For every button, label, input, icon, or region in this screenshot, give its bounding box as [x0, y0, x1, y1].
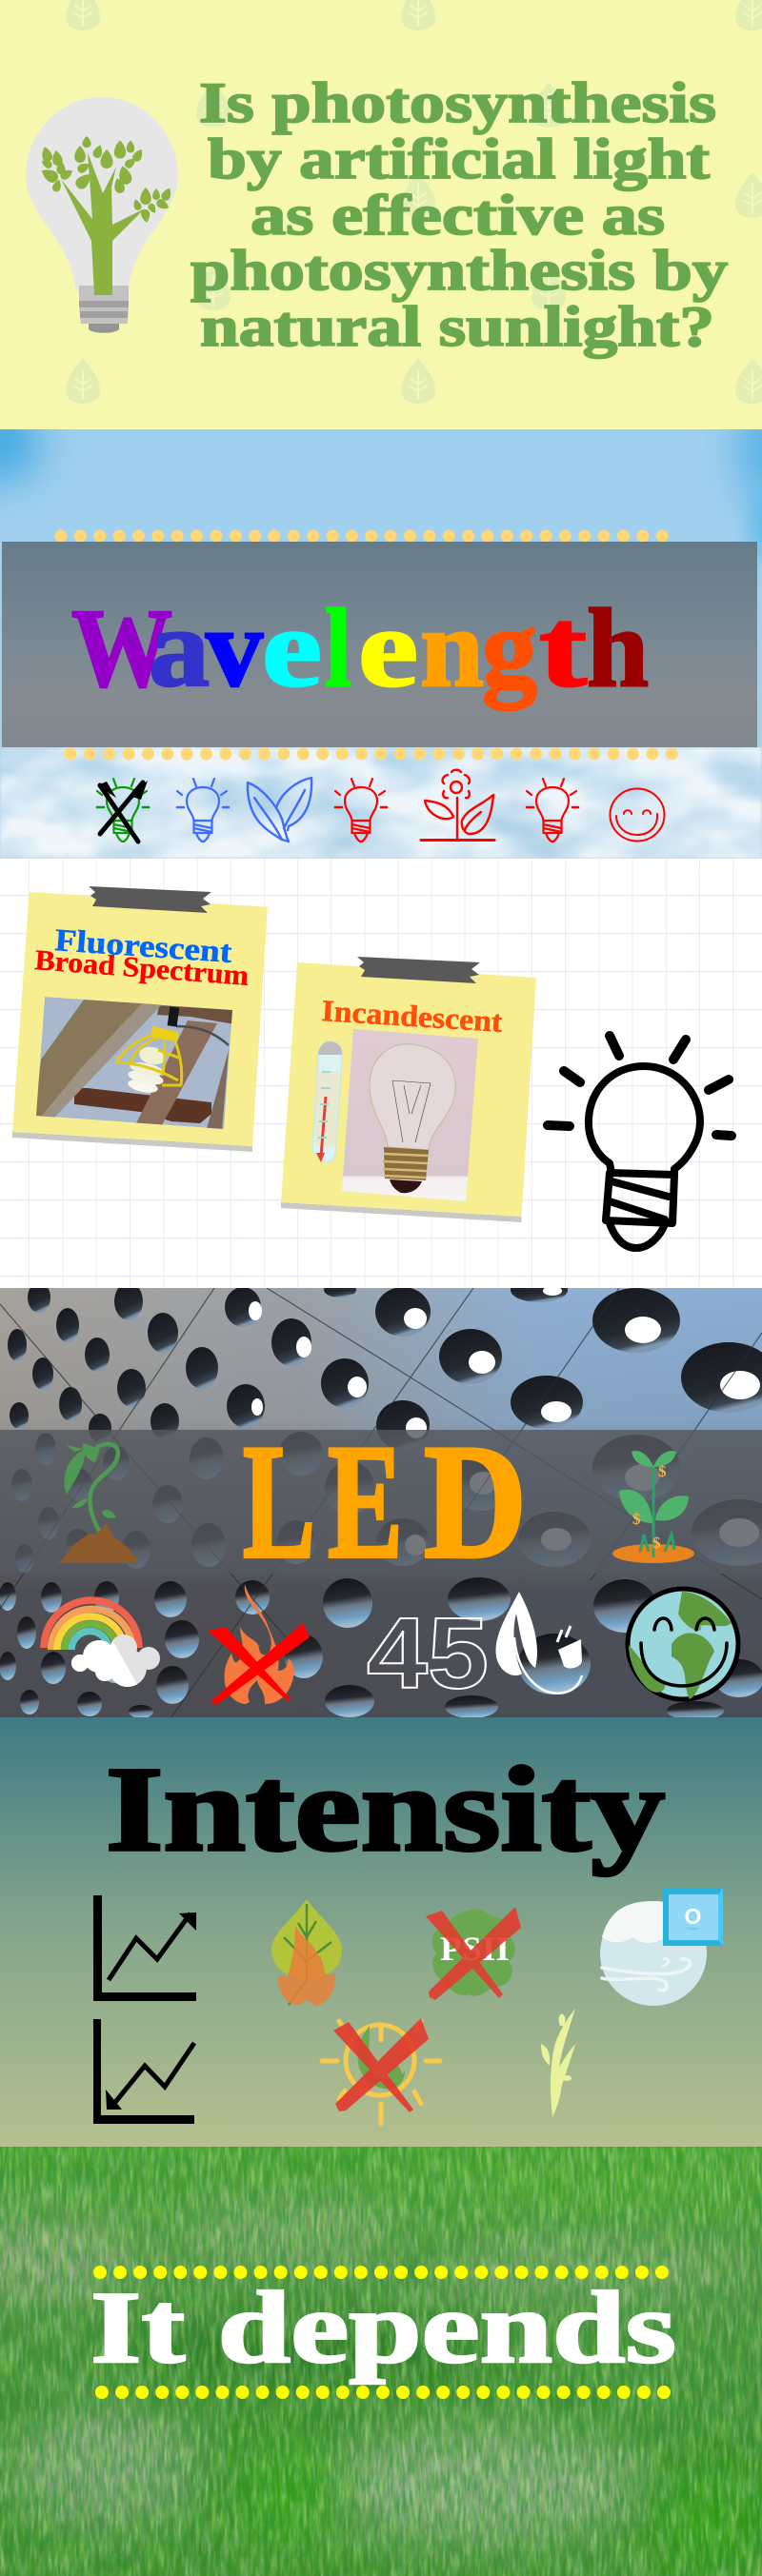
- label: 450 nm value: 45: [367, 1597, 489, 1710]
- heading: LED: E: [328, 1412, 403, 1593]
- panel: LED section: [0, 1278, 762, 1720]
- heading: Wavelength: e: [262, 585, 322, 710]
- icon: cloud and oxygen: [600, 1888, 723, 2006]
- icon: oxygen element tile: [663, 1888, 723, 1946]
- heading: Wavelength: [71, 585, 649, 710]
- note: incandescent: [281, 957, 732, 1248]
- tape: [89, 886, 211, 913]
- heading: Wavelength: l: [325, 585, 351, 710]
- heading: Wavelength: W: [71, 585, 172, 710]
- heading: Wavelength: g: [482, 585, 537, 710]
- heading: It depends: It depends: [90, 2271, 676, 2385]
- photo: incandescent bulb: [342, 1029, 478, 1201]
- icon: oxygen element tile: Oxygen: [687, 1926, 699, 1931]
- note: fluorescent: [12, 886, 268, 1152]
- chart icon: falling arrow: [93, 2019, 194, 2124]
- icon: rainbow with cloud: [44, 1600, 160, 1687]
- heading: Wavelength: e: [358, 585, 418, 710]
- icon: thermometer: [312, 1041, 342, 1162]
- icon: leaf with flame: [271, 1899, 342, 2006]
- icon: red flower with leaves: [421, 770, 494, 840]
- heading: LED: [243, 1412, 527, 1593]
- photo: fluorescent bulb in yellow cage: [34, 997, 234, 1131]
- icon: crossed-out PSII: [426, 1907, 521, 2000]
- title: as effective as: [251, 184, 665, 247]
- title: Is photosynthesis: [199, 71, 716, 134]
- heading: Wavelength: v: [206, 585, 263, 710]
- icon: red bulb: [527, 779, 578, 842]
- overlay band: [0, 1430, 762, 1574]
- panel: title section: [0, 0, 762, 429]
- icon: crossed-out PSII: PSII: [440, 1930, 510, 1968]
- icon: crossed-out flame: [208, 1584, 310, 1705]
- panel: conclusion section: [0, 2147, 762, 2576]
- icon: blue bulb: [177, 779, 229, 842]
- heading: Wavelength: n: [420, 585, 484, 710]
- overlay band: [2, 542, 757, 747]
- icon: leaf and plug: [496, 1592, 582, 1694]
- icon: crossed-out sun with leaf: [322, 2018, 440, 2124]
- icon: money plant: $: [658, 1462, 667, 1480]
- icon: money plant: [612, 1451, 694, 1563]
- icon: oxygen element tile: O: [685, 1904, 701, 1929]
- icon: pale plant sprig: [541, 2009, 575, 2117]
- icon: smiling earth: [628, 1589, 738, 1699]
- panel: wavelength section: [0, 390, 762, 859]
- icon: sprout in soil: [59, 1443, 140, 1563]
- dotted border: bottom: [70, 748, 672, 760]
- chart icon: rising arrow: [93, 1895, 196, 2001]
- heading: LED: L: [243, 1412, 315, 1593]
- tape: [357, 957, 480, 983]
- label: Fluorescent: Fluorescent: [53, 923, 233, 970]
- icon: money plant: $: [652, 1534, 661, 1552]
- heading: Wavelength: t: [539, 585, 587, 710]
- heading: LED: D: [424, 1412, 527, 1593]
- icon: red smiley: [610, 788, 665, 842]
- title: by artificial light: [208, 128, 710, 190]
- heading: Intensity: Intensity: [106, 1743, 665, 1876]
- icon: large black bulb: [548, 1036, 732, 1248]
- icon: money plant: $: [632, 1510, 641, 1528]
- panel: light types section: [0, 859, 762, 2576]
- heading: Wavelength: a: [149, 585, 210, 710]
- panel: intensity section: [0, 1717, 762, 2147]
- title: photosynthesis by: [190, 239, 728, 302]
- label: Broad Spectrum: Broad Spectrum: [33, 944, 250, 992]
- dotted border: top: [61, 529, 663, 543]
- icon: red bulb: [335, 779, 387, 842]
- icon: crossed-out green bulb: [97, 779, 149, 842]
- title: [190, 71, 728, 358]
- icon: blue leaves: [248, 778, 311, 842]
- dotted border: top: [100, 2266, 682, 2279]
- icon: light bulb with tree: [26, 97, 178, 333]
- title: natural sunlight?: [200, 295, 714, 358]
- label: Incandescent: Incandescent: [321, 993, 504, 1039]
- heading: Wavelength: h: [587, 585, 649, 710]
- dotted border: bottom: [102, 2386, 684, 2399]
